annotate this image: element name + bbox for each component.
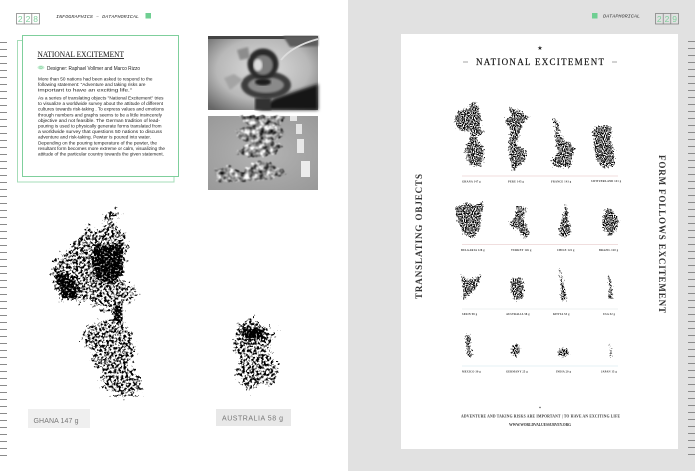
row 1 labels (462, 180, 622, 184)
row 1 labels: FRANCE 143 g (551, 180, 572, 184)
poster title: NATIONAL EXCITEMENT (476, 57, 604, 67)
intro paragraph: More than 50 nations had been asked to respond to the (38, 76, 153, 82)
row 3 labels (462, 313, 616, 316)
specimen tag: Ghana (28, 409, 90, 428)
right page number (656, 14, 678, 24)
description paragraph: objective and not feasible. The German tradition of lead- (38, 118, 160, 123)
photo: pewter pouring goblet (208, 36, 318, 110)
designer credit: Designer: Raphael Vollmer and Marco Rizzo (47, 66, 140, 72)
row 3 labels: SPAIN 98 g (462, 313, 478, 316)
specimen tag: Australia: AUSTRALIA 58 g (222, 416, 283, 422)
pewter form: Ghana (53, 210, 144, 398)
left page number: 2 (26, 14, 31, 24)
right page number: 2 (657, 14, 662, 24)
intro paragraph (38, 76, 153, 92)
specimen tag: Australia (216, 409, 291, 426)
back frame (18, 40, 174, 182)
row 4 labels: GERMANY 25 g (506, 370, 528, 374)
left page number: 8 (33, 14, 38, 24)
panel: left page (0, 0, 348, 471)
row 2 labels (461, 249, 619, 252)
photo: solidified pewter pieces (208, 116, 318, 190)
row 4 rule (462, 365, 618, 367)
row 1 rule (462, 175, 618, 177)
description paragraph: through numbers and graphs seems to be a little insincerely (38, 112, 163, 117)
left page number: 2 (18, 14, 23, 24)
front frame (22, 36, 178, 176)
row 4 labels: MEXICO 30 g (462, 370, 481, 374)
description paragraph: attitude of the particular country towards the given statement. (38, 152, 164, 156)
row 4 labels (462, 370, 617, 374)
poster star ornament: ★ (537, 45, 543, 52)
description paragraph: to visualize a worldwide survey about the attitude of different (38, 101, 164, 106)
left page ruler ticks (0, 42, 7, 458)
row 1 labels: GHANA 147 g (462, 180, 481, 184)
vertical title left: TRANSLATING OBJECTS (414, 174, 424, 299)
right page number: 2 (665, 14, 670, 24)
intro paragraph: following statement: "Adventure and taking risks are (38, 82, 146, 87)
panel: poster (401, 34, 678, 449)
panel: right page (348, 0, 695, 471)
row 3 forms (461, 267, 613, 300)
row 2 rule (462, 244, 618, 246)
specimen tag: Ghana: GHANA 147 g (34, 418, 79, 425)
description paragraph: pouring is used to physically generate forms translated from (38, 124, 162, 128)
right page ruler ticks (688, 41, 695, 458)
row 2 labels: TURKEY 126 g (511, 249, 532, 252)
row 3 labels: USA 52 g (603, 313, 616, 316)
row 2 labels: BULGARIA 128 g (461, 249, 485, 252)
poster url: WWW.WORLDVALUESSURVEY.ORG (509, 423, 571, 427)
description paragraph: resultant form becomes more extreme or calm, visualizing the (38, 146, 165, 151)
article heading: NATIONAL EXCITEMENT (38, 50, 124, 59)
poster statement: ADVENTURE AND TAKING RISKS ARE IMPORTANT | TO HAVE AN EXCITING LIFE (461, 414, 621, 418)
row 3 labels: KENYA 55 g (553, 313, 570, 316)
pewter form: Australia (235, 318, 282, 392)
row 2 labels: BRAZIL 120 g (599, 249, 619, 252)
row 2 forms (455, 202, 619, 238)
row 3 rule (462, 308, 618, 310)
description paragraph: a worldwide survey that questions 50 nations to discuss (38, 129, 163, 134)
panel: article text box (18, 36, 178, 182)
row 4 labels: INDIA 20 g (556, 370, 572, 374)
row 4 labels: JAPAN 15 g (601, 370, 617, 374)
row 3 labels: AUSTRALIA 58 g (506, 313, 530, 316)
description paragraph (38, 96, 165, 156)
right running header: DATAPHORICAL (603, 14, 640, 20)
poster footer ornament (539, 407, 541, 408)
description paragraph: As a series of translating objects "National Excitement" tries (38, 96, 164, 100)
row 2 labels: CHILE 122 g (557, 249, 575, 252)
row 4 forms (466, 334, 612, 357)
description paragraph: cultures towards risk-taking . To express values and emotions (38, 107, 165, 112)
row 1 forms (454, 101, 614, 171)
left page number (16, 14, 40, 24)
description paragraph: adventure and risk-taking. Pewter is poured into water. (38, 135, 151, 140)
description paragraph: Depending on the pouring temperature of the pewter, the (38, 140, 157, 145)
right header marker (592, 13, 598, 18)
title flourishes (463, 61, 617, 63)
designer icon (38, 65, 44, 70)
intro paragraph: important to have an exciting life." (38, 88, 132, 92)
right page number: 9 (672, 14, 677, 24)
vertical title right: FORM FOLLOWS EXCITEMENT (657, 155, 667, 313)
row 1 labels: SWITZERLAND 141 g (591, 180, 622, 183)
designer icon: D (39, 65, 43, 70)
left running header: INFOGRAPHICS – DATAPHORICAL (56, 14, 139, 20)
row 1 labels: PERU 145 g (508, 180, 524, 184)
header marker left (146, 13, 151, 18)
